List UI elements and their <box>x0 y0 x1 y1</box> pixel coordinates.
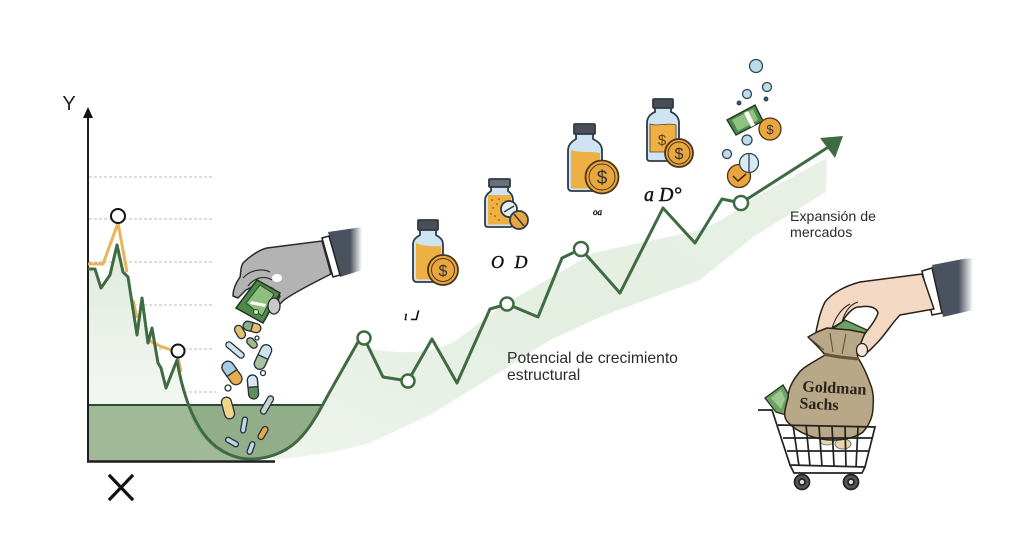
axes <box>83 107 275 462</box>
bag text: Sachs <box>799 395 839 414</box>
icon group: bubbles, cash, coins: $ <box>766 122 774 137</box>
icon: bottle with coin 4: $ <box>675 146 684 163</box>
chart markers <box>111 196 748 388</box>
fingers <box>243 270 272 286</box>
cash bills at bag top <box>827 320 867 342</box>
label: structural growth potential: Potencial de crecimiento <box>507 350 678 367</box>
icon: bottle with coin 4: $ <box>658 132 667 149</box>
thumb <box>268 298 280 314</box>
icon: bottle with coin 1: $ <box>439 263 448 280</box>
finger creases <box>832 302 858 328</box>
bag text: Goldman <box>802 378 867 399</box>
dotted grid lines <box>89 177 216 392</box>
pill <box>740 154 758 172</box>
handwritten marks <box>404 184 681 323</box>
cash <box>727 105 763 135</box>
hand <box>816 274 934 355</box>
handwritten marks: oa <box>593 207 602 217</box>
main green line <box>88 146 830 459</box>
sleeve <box>932 258 973 317</box>
icon: bottle with coin 3 <box>568 124 618 194</box>
label: market expansion: Expansión de <box>790 209 876 225</box>
shopping cart <box>758 410 875 490</box>
cuff <box>922 268 942 315</box>
falling pills <box>220 320 275 455</box>
growth arrow head <box>820 136 843 158</box>
handwritten marks: O D <box>491 252 530 272</box>
cash bundle <box>236 280 280 323</box>
gray hand dropping money <box>233 227 362 323</box>
pale area under left decline <box>88 245 187 405</box>
thumb nail <box>856 344 868 356</box>
handwritten marks: a D° <box>644 184 681 206</box>
axis label X <box>110 476 132 499</box>
icon group: bubbles, cash, coins <box>722 60 781 188</box>
label: structural growth potential: estructural <box>507 367 580 384</box>
orange comparison line <box>88 223 181 372</box>
sleeve <box>328 227 362 277</box>
coins inside bag bottom <box>820 437 834 445</box>
check coin <box>728 164 750 188</box>
handwritten marks: ı ⅃ <box>404 308 420 323</box>
hand holding Goldman Sachs money bag over cart <box>758 258 973 490</box>
growth area under the line <box>263 158 827 460</box>
axis label Y: Y <box>62 93 76 115</box>
icon: bottle with pills 2 <box>485 179 528 229</box>
label: market expansion: mercados <box>790 225 852 241</box>
icon: bottle with coin 1 <box>413 220 458 285</box>
coin <box>759 118 781 140</box>
green trough block <box>88 404 323 461</box>
icon: bottle with coin 4 <box>647 99 693 167</box>
money bag <box>785 328 873 440</box>
cuff <box>322 236 340 277</box>
hand <box>233 241 331 312</box>
icon: bottle with coin 3: $ <box>597 168 608 189</box>
